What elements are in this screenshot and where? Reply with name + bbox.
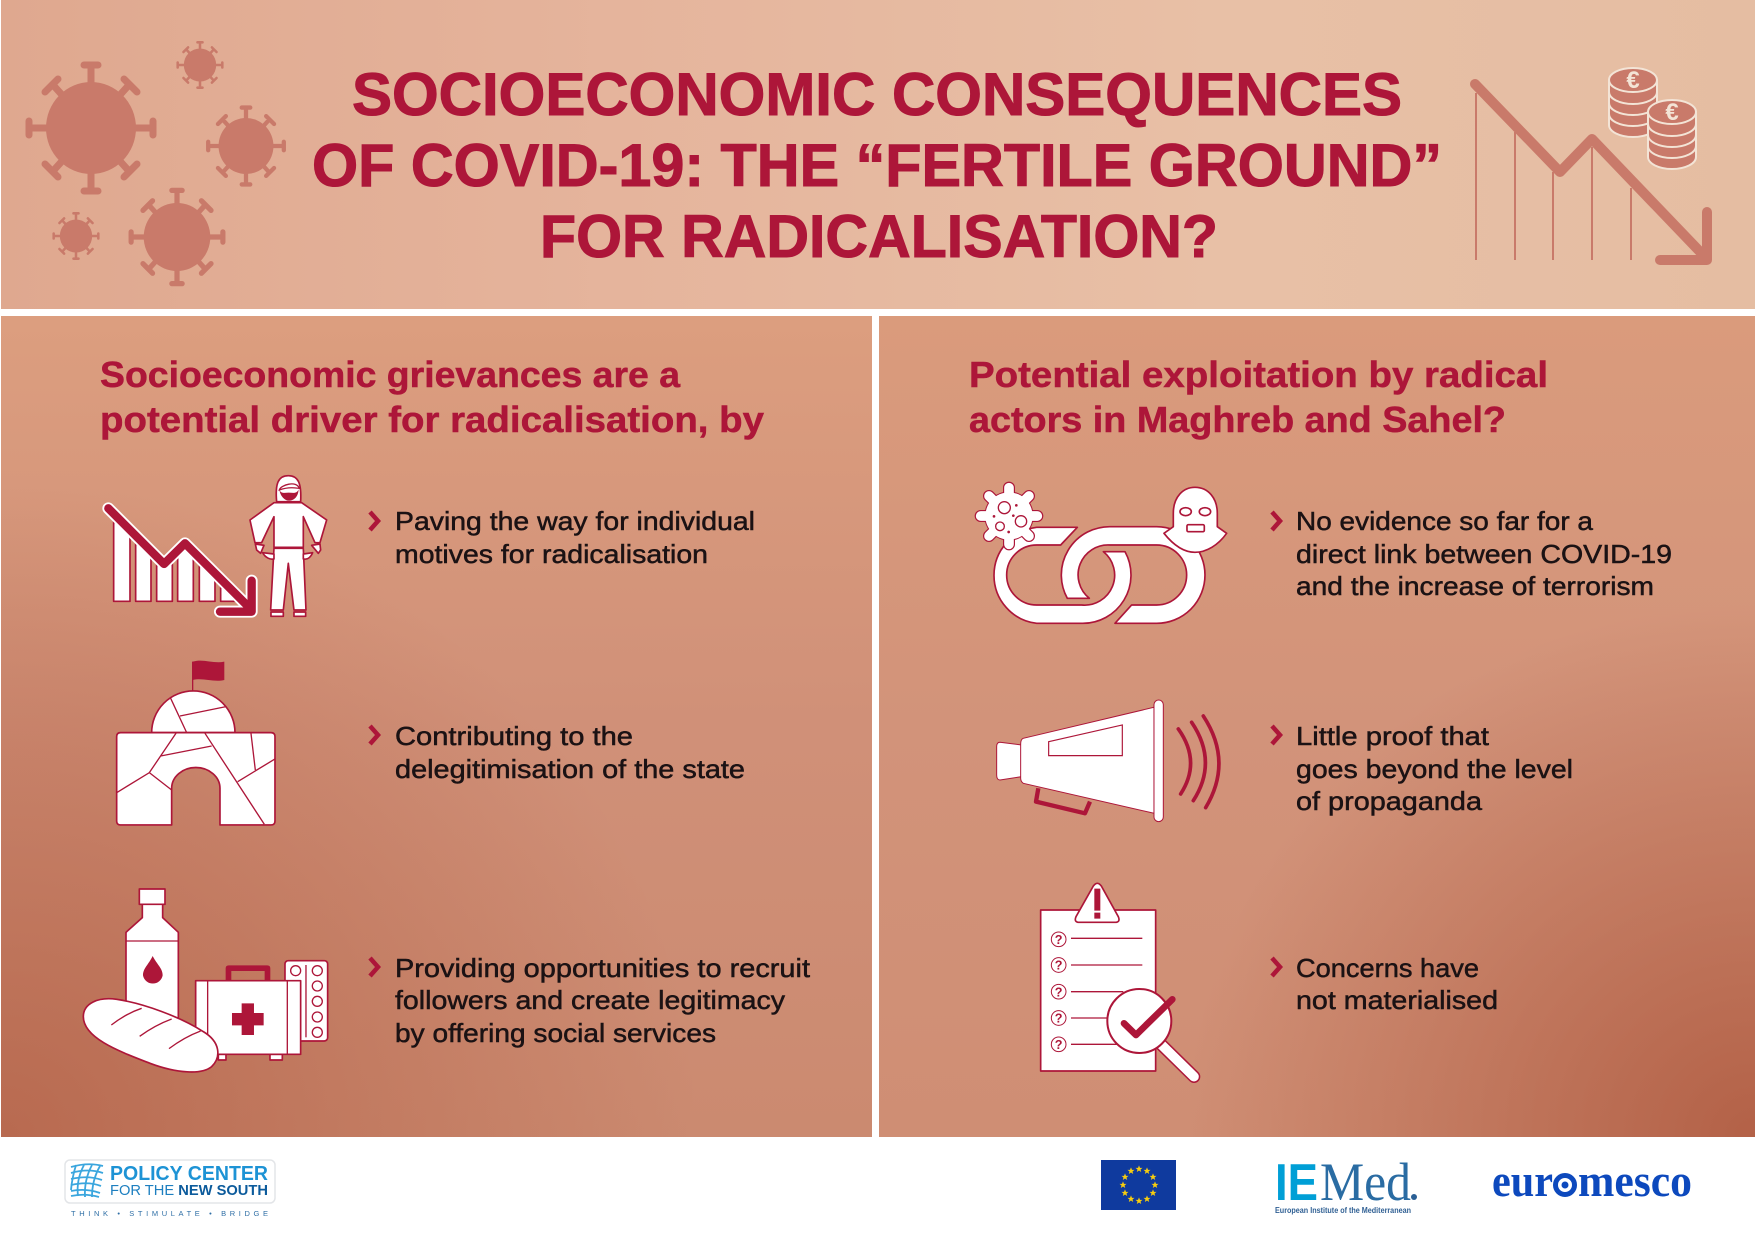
icon: falling chart with euro coins [1475, 67, 1707, 260]
heading: right panel: actors in Maghreb and Sahel? [969, 399, 1506, 440]
icon: checklist with warning and magnifier: ? [1055, 1038, 1063, 1052]
icon: checklist with warning and magnifier: ? [1055, 933, 1063, 947]
icon: falling chart with euro coins: € [1626, 67, 1640, 94]
icon: falling chart and man with empty pockets [108, 476, 327, 616]
heading: right panel [969, 354, 1548, 440]
bullet: right 2: Little proof that [1296, 721, 1490, 751]
bullet: right 1: No evidence so far for a [1296, 506, 1594, 536]
icon: cracked state building with flag [117, 661, 275, 825]
icon: coronavirus cluster [29, 42, 284, 284]
title: FOR RADICALISATION? [540, 203, 1218, 270]
bullet: right 3: Concerns have [1296, 953, 1479, 983]
heading: right panel: Potential exploitation by radical [969, 354, 1548, 395]
bullet: left 3: Providing opportunities to recruit [395, 953, 811, 983]
icon: checklist with warning and magnifier: ? [1055, 959, 1063, 973]
bullet: left 1: motives for radicalisation [395, 539, 708, 569]
bullet: right 1: and the increase of terrorism [1296, 571, 1654, 601]
icon: chain linking virus and masked terrorist [981, 487, 1227, 623]
logo: euromesco: eur [1492, 1155, 1553, 1206]
icon: checklist with warning and magnifier: ? [1055, 1012, 1063, 1026]
icon: megaphone [997, 700, 1219, 822]
logo: EU flag [1101, 1160, 1176, 1210]
bullet: right 3: not materialised [1296, 985, 1498, 1015]
bullet: left 1: Paving the way for individual [395, 506, 755, 536]
title [312, 61, 1442, 270]
icon: checklist with warning and magnifier: ? [1055, 985, 1063, 999]
panel: right panel background [879, 316, 1755, 1137]
title: OF COVID-19: THE “FERTILE GROUND” [312, 132, 1442, 199]
bullet: left 3: followers and create legitimacy [395, 985, 785, 1015]
logo: IEMed: Med [1320, 1152, 1411, 1212]
title: SOCIOECONOMIC CONSEQUENCES [352, 61, 1402, 128]
logo: euromesco [1492, 1155, 1692, 1206]
logo: IEMed [1275, 1152, 1417, 1215]
bullet: right 2 [1272, 721, 1573, 816]
bullet: left 2: Contributing to the [395, 721, 633, 751]
heading: left panel: potential driver for radicalisation, by [100, 399, 764, 440]
logo: Policy Center for the New South: FOR THE NEW SOUTH [110, 1182, 268, 1199]
logo: IEMed: IE [1275, 1154, 1318, 1212]
bullet: left 3 [370, 953, 811, 1048]
bullet: left 1 [370, 506, 755, 569]
icon: checklist with warning and magnifier [1041, 883, 1194, 1077]
panel: left panel background [1, 316, 872, 1137]
bullet: left 2 [370, 721, 745, 784]
logo: euromesco: mesco [1578, 1155, 1692, 1206]
icon: falling chart with euro coins: € [1665, 99, 1679, 126]
logo: IEMed: European Institute of the Mediterranean [1275, 1206, 1411, 1215]
bullet: right 2: goes beyond the level [1296, 754, 1573, 784]
bullet: left 3: by offering social services [395, 1018, 716, 1048]
logo: Policy Center for the New South: THINK • STIMULATE • BRIDGE [71, 1209, 268, 1218]
heading: left panel [100, 354, 764, 440]
bullet: right 1 [1272, 506, 1672, 601]
logo: Policy Center for the New South [65, 1160, 275, 1218]
heading: left panel: Socioeconomic grievances are a [100, 354, 681, 395]
icon: water bottle, bread, first aid kit and pills [83, 889, 328, 1072]
logo: Policy Center for the New South: POLICY CENTER [110, 1163, 269, 1185]
bullet: right 2: of propaganda [1296, 786, 1483, 816]
panel: header banner [1, 0, 1755, 309]
bullet: right 1: direct link between COVID-19 [1296, 539, 1672, 569]
bullet: left 2: delegitimisation of the state [395, 754, 745, 784]
bullet: right 3 [1272, 953, 1498, 1015]
